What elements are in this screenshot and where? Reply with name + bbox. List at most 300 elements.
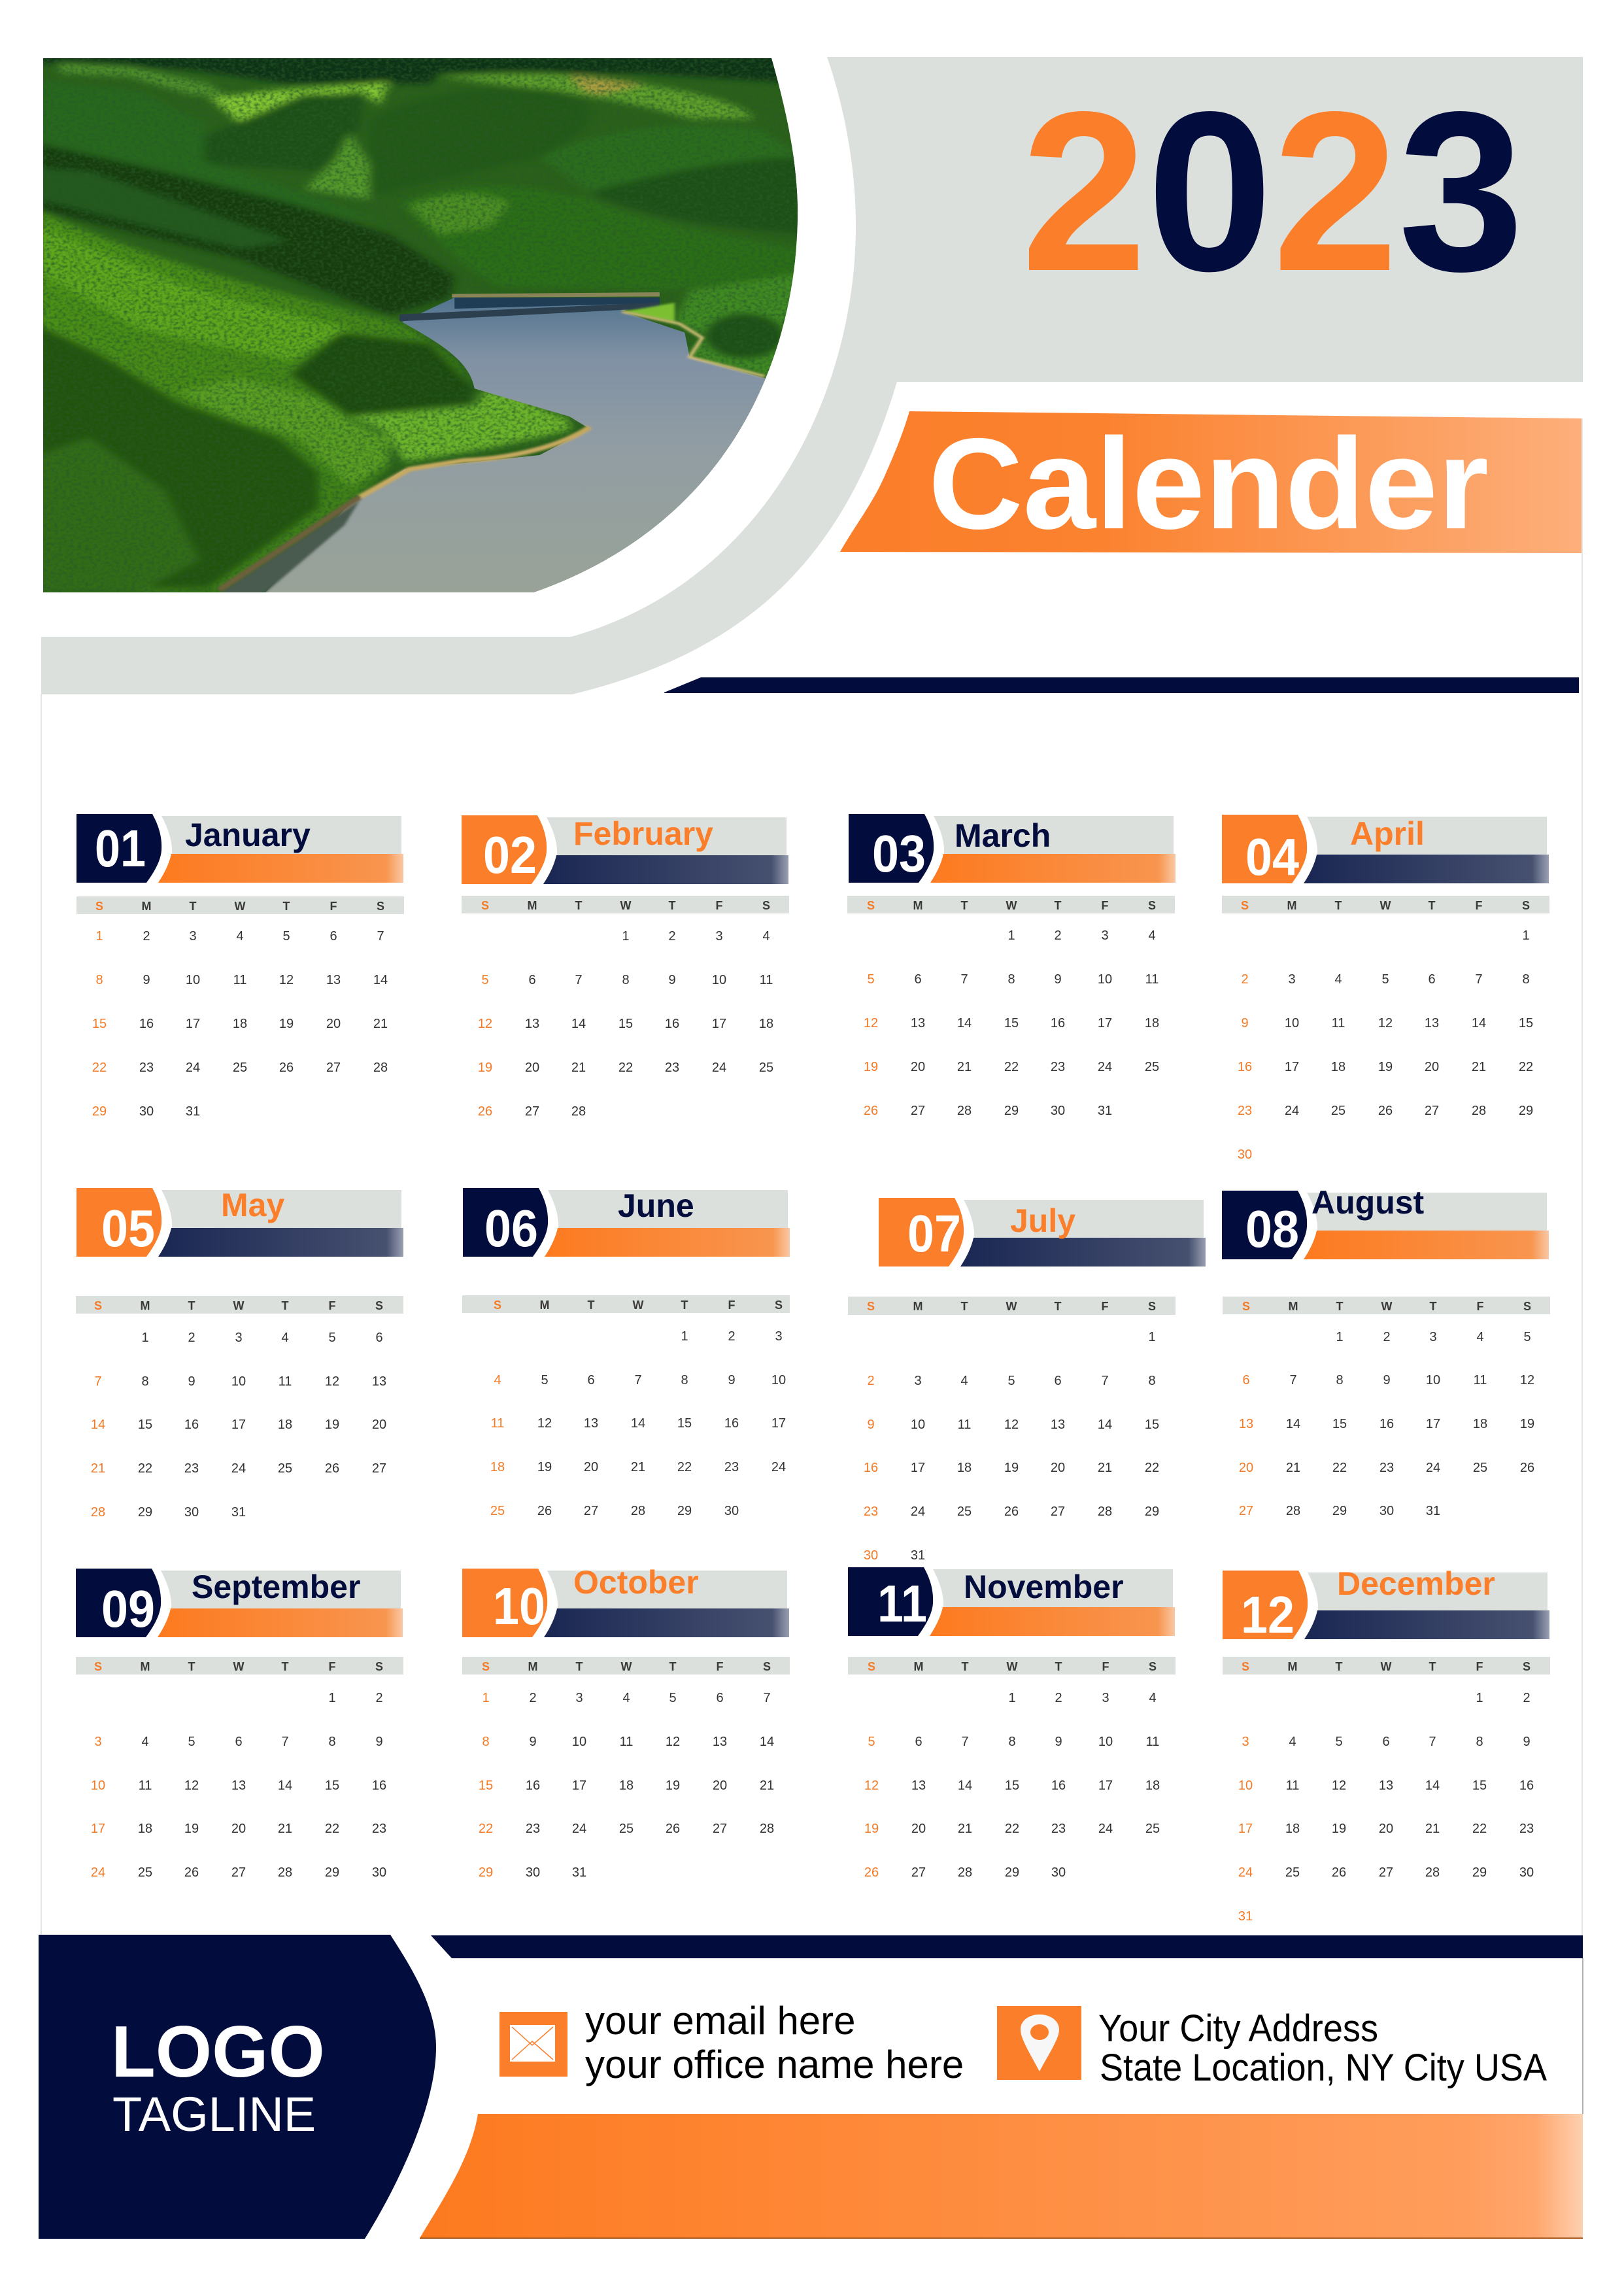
July dates: 31 [911, 1548, 925, 1563]
March dates: 29 [1004, 1104, 1019, 1118]
heading: Calender: Calender [928, 411, 1489, 556]
June dates: 10 [771, 1373, 786, 1387]
March header: March [955, 817, 1051, 854]
contact: email and office text: your office name here [585, 2043, 964, 2086]
July header [879, 1198, 1206, 1266]
April dates: 16 [1238, 1060, 1252, 1074]
January weekdays: T [190, 900, 196, 913]
November dates: 3 [1102, 1691, 1109, 1705]
May dates [91, 1331, 386, 1520]
July dates: 28 [1098, 1504, 1112, 1519]
November dates: 5 [868, 1735, 875, 1749]
March weekdays: T [1054, 899, 1062, 912]
July dates: 10 [911, 1418, 925, 1432]
January dates: 16 [139, 1017, 154, 1031]
September dates [91, 1691, 386, 1880]
January dates: 10 [186, 973, 200, 987]
August weekdays: S [1242, 1300, 1250, 1313]
tagline text: TAGLINE [112, 2087, 316, 2141]
August dates: 16 [1379, 1417, 1394, 1431]
November dates: 19 [864, 1822, 879, 1836]
October dates: 7 [763, 1691, 771, 1705]
March dates: 21 [957, 1060, 972, 1074]
July dates: 23 [864, 1504, 878, 1519]
May weekdays: W [233, 1299, 245, 1312]
June dates: 5 [541, 1373, 549, 1387]
March header: 03 [872, 824, 926, 883]
April dates: 28 [1472, 1104, 1486, 1118]
May weekdays: S [375, 1299, 383, 1312]
November weekdays [848, 1657, 1176, 1674]
December dates: 25 [1285, 1865, 1300, 1880]
August dates: 18 [1473, 1417, 1487, 1431]
July weekdays: S [867, 1300, 875, 1313]
December header: December [1337, 1565, 1495, 1602]
November weekdays: T [961, 1660, 969, 1673]
January dates: 22 [92, 1061, 107, 1075]
February dates: 18 [759, 1017, 773, 1031]
September dates: 26 [184, 1865, 199, 1880]
March dates: 9 [1054, 972, 1062, 987]
December weekdays: T [1429, 1660, 1436, 1673]
November dates: 12 [864, 1778, 879, 1793]
January dates: 19 [279, 1017, 294, 1031]
November dates: 20 [911, 1822, 926, 1836]
November dates: 2 [1055, 1691, 1062, 1705]
October header [462, 1564, 789, 1637]
September weekdays: W [233, 1660, 245, 1673]
September dates: 30 [372, 1865, 386, 1880]
November dates: 7 [961, 1735, 969, 1749]
October dates: 29 [479, 1865, 493, 1880]
January weekdays: S [377, 900, 384, 913]
August dates: 17 [1426, 1417, 1440, 1431]
January dates: 11 [233, 973, 246, 987]
January weekdays: M [141, 900, 152, 913]
February weekdays: F [715, 899, 723, 912]
October dates: 28 [760, 1822, 774, 1836]
January dates: 9 [143, 973, 150, 987]
October weekdays: T [575, 1660, 583, 1673]
May dates: 12 [325, 1374, 339, 1389]
March dates: 22 [1004, 1060, 1019, 1074]
November dates: 16 [1051, 1778, 1066, 1793]
May dates: 11 [279, 1374, 292, 1389]
May dates: 28 [91, 1505, 105, 1520]
November dates: 17 [1098, 1778, 1113, 1793]
March weekdays: T [961, 899, 968, 912]
April dates: 25 [1331, 1104, 1345, 1118]
October dates: 19 [666, 1778, 680, 1793]
July weekdays: S [1148, 1300, 1156, 1313]
September dates: 4 [141, 1735, 149, 1749]
December dates: 12 [1332, 1778, 1346, 1793]
October weekdays: S [482, 1660, 490, 1673]
September dates: 27 [231, 1865, 246, 1880]
forest texture [39, 52, 810, 599]
August dates: 28 [1286, 1504, 1300, 1518]
September dates: 14 [278, 1778, 292, 1793]
panel: August [1222, 1184, 1550, 1518]
August dates: 3 [1429, 1330, 1437, 1344]
April dates: 11 [1332, 1016, 1345, 1030]
footer right edge line [1582, 1958, 1583, 2114]
September dates: 10 [91, 1778, 105, 1793]
February header: February [573, 815, 713, 852]
August dates: 13 [1239, 1417, 1253, 1431]
June weekdays: S [775, 1299, 783, 1312]
logo text: LOGO [111, 2011, 325, 2092]
August weekdays: M [1288, 1300, 1298, 1313]
August dates: 24 [1426, 1461, 1440, 1475]
June header [463, 1187, 790, 1257]
May dates: 31 [231, 1505, 246, 1520]
August dates: 30 [1379, 1504, 1394, 1518]
March dates: 4 [1148, 928, 1156, 943]
May dates: 20 [372, 1418, 386, 1432]
September dates: 5 [188, 1735, 195, 1749]
June dates: 8 [681, 1373, 688, 1387]
January dates: 31 [186, 1104, 200, 1119]
December dates: 11 [1286, 1778, 1299, 1793]
January weekdays: S [95, 900, 103, 913]
heading: year 2023: 2023 [1021, 64, 1524, 318]
November dates: 28 [958, 1865, 972, 1880]
February dates: 12 [478, 1017, 492, 1031]
September weekdays: S [375, 1660, 383, 1673]
August dates: 2 [1383, 1330, 1391, 1344]
February weekdays: T [575, 899, 582, 912]
November dates: 22 [1005, 1822, 1019, 1836]
February dates: 9 [668, 973, 676, 987]
September dates: 24 [91, 1865, 105, 1880]
February weekdays: W [620, 899, 632, 912]
July dates: 24 [911, 1504, 925, 1519]
panel: October [462, 1564, 790, 1880]
October dates: 16 [526, 1778, 540, 1793]
September dates: 22 [325, 1822, 339, 1836]
June dates: 22 [677, 1460, 692, 1474]
July weekdays: F [1101, 1300, 1109, 1313]
December dates: 30 [1519, 1865, 1534, 1880]
February dates: 11 [760, 973, 773, 987]
June dates: 19 [537, 1460, 552, 1474]
April dates: 5 [1381, 972, 1389, 987]
July dates: 4 [960, 1374, 968, 1388]
February dates: 15 [618, 1017, 633, 1031]
August dates: 1 [1336, 1330, 1344, 1344]
October dates: 24 [572, 1822, 586, 1836]
June dates: 30 [724, 1504, 739, 1518]
October dates: 31 [572, 1865, 586, 1880]
July dates: 6 [1054, 1374, 1062, 1388]
October dates: 21 [760, 1778, 774, 1793]
December dates [1238, 1691, 1534, 1924]
July dates: 22 [1145, 1461, 1159, 1475]
March dates: 10 [1098, 972, 1112, 987]
May weekdays: S [94, 1299, 102, 1312]
June weekdays [462, 1295, 790, 1313]
September weekdays: T [281, 1660, 289, 1673]
July dates: 2 [867, 1374, 875, 1388]
April dates: 7 [1475, 972, 1483, 987]
November header [848, 1567, 1175, 1636]
November dates: 24 [1098, 1822, 1113, 1836]
March dates: 7 [960, 972, 968, 987]
July dates: 18 [957, 1461, 972, 1475]
December dates: 18 [1285, 1822, 1300, 1836]
October weekdays: S [763, 1660, 771, 1673]
May header: May [221, 1187, 284, 1223]
August dates: 4 [1476, 1330, 1484, 1344]
November dates: 10 [1098, 1735, 1113, 1749]
December dates: 22 [1472, 1822, 1487, 1836]
March dates: 31 [1098, 1104, 1112, 1118]
October dates: 2 [529, 1691, 537, 1705]
August weekdays: T [1429, 1300, 1437, 1313]
September weekdays: M [140, 1660, 150, 1673]
January dates: 28 [373, 1061, 388, 1075]
July header: 07 [907, 1204, 961, 1263]
April dates: 27 [1425, 1104, 1439, 1118]
June dates: 13 [584, 1416, 598, 1431]
July dates: 14 [1098, 1418, 1112, 1432]
February weekdays: M [527, 899, 537, 912]
June dates: 4 [494, 1373, 501, 1387]
May dates: 8 [141, 1374, 149, 1389]
December dates: 5 [1335, 1735, 1343, 1749]
June dates: 6 [587, 1373, 595, 1387]
May dates: 5 [328, 1331, 336, 1345]
September dates: 3 [94, 1735, 102, 1749]
September header: 09 [101, 1580, 155, 1638]
March dates [864, 928, 1159, 1118]
August dates: 27 [1239, 1504, 1253, 1518]
February dates: 7 [575, 973, 583, 987]
panel: November [848, 1567, 1176, 1880]
September dates: 16 [372, 1778, 386, 1793]
August dates: 31 [1426, 1504, 1440, 1518]
November weekdays: F [1102, 1660, 1109, 1673]
June dates: 2 [728, 1329, 736, 1344]
September weekdays: F [328, 1660, 336, 1673]
November weekdays: W [1007, 1660, 1017, 1673]
July dates: 5 [1007, 1374, 1015, 1388]
February dates: 16 [665, 1017, 679, 1031]
March weekdays: M [913, 899, 923, 912]
August dates: 19 [1520, 1417, 1534, 1431]
November header: November [964, 1569, 1124, 1605]
February dates: 19 [478, 1061, 492, 1075]
August dates: 29 [1332, 1504, 1347, 1518]
April dates: 14 [1472, 1016, 1486, 1030]
March dates: 13 [911, 1016, 925, 1030]
January header: January [185, 817, 311, 853]
February weekdays: S [762, 899, 770, 912]
April dates: 4 [1334, 972, 1342, 987]
October dates: 4 [622, 1691, 630, 1705]
September dates: 9 [375, 1735, 383, 1749]
July dates: 12 [1004, 1418, 1019, 1432]
March dates: 27 [911, 1104, 925, 1118]
March weekdays: F [1101, 899, 1109, 912]
August dates: 10 [1426, 1373, 1440, 1387]
December dates: 15 [1472, 1778, 1487, 1793]
February dates [478, 929, 773, 1119]
May dates: 27 [372, 1461, 386, 1476]
January weekdays [76, 896, 404, 914]
January dates: 1 [95, 929, 103, 944]
October dates: 8 [482, 1735, 490, 1749]
December weekdays: M [1288, 1660, 1297, 1673]
January dates: 27 [326, 1061, 341, 1075]
April dates: 12 [1378, 1016, 1393, 1030]
December dates: 26 [1332, 1865, 1346, 1880]
October dates: 20 [713, 1778, 727, 1793]
April dates: 18 [1331, 1060, 1345, 1074]
September dates: 1 [328, 1691, 336, 1705]
March dates: 2 [1054, 928, 1062, 943]
icon: email envelope [499, 2012, 567, 2077]
November dates [864, 1691, 1160, 1880]
December weekdays: F [1476, 1660, 1483, 1673]
September header: September [192, 1569, 360, 1605]
January weekdays: W [234, 900, 246, 913]
banner: orange Calender ribbon [840, 411, 1583, 553]
August header: August [1311, 1184, 1425, 1221]
January dates: 6 [330, 929, 337, 944]
August dates: 6 [1242, 1373, 1250, 1387]
October dates: 18 [619, 1778, 634, 1793]
October dates: 12 [666, 1735, 680, 1749]
April dates: 22 [1519, 1060, 1533, 1074]
May dates: 17 [231, 1418, 246, 1432]
June header: June [618, 1187, 694, 1224]
December dates: 24 [1238, 1865, 1253, 1880]
April dates: 13 [1425, 1016, 1439, 1030]
November weekdays: S [1149, 1660, 1157, 1673]
June dates: 29 [677, 1504, 692, 1518]
September dates: 25 [138, 1865, 152, 1880]
February header [462, 815, 788, 884]
July weekdays: T [961, 1300, 968, 1313]
May header: 05 [101, 1199, 155, 1257]
July dates: 27 [1051, 1504, 1065, 1519]
August dates: 22 [1332, 1461, 1347, 1475]
July dates: 19 [1004, 1461, 1019, 1475]
August dates: 7 [1289, 1373, 1297, 1387]
June dates: 21 [631, 1460, 645, 1474]
July header: July [1010, 1202, 1075, 1239]
October dates: 6 [716, 1691, 724, 1705]
January dates: 18 [233, 1017, 247, 1031]
October dates: 10 [572, 1735, 586, 1749]
February dates: 14 [571, 1017, 586, 1031]
March dates: 28 [957, 1104, 972, 1118]
April dates: 23 [1238, 1104, 1252, 1118]
June dates: 17 [771, 1416, 786, 1431]
June weekdays: F [728, 1299, 735, 1312]
May dates: 21 [91, 1461, 105, 1476]
April weekdays: S [1241, 899, 1249, 912]
November dates: 25 [1145, 1822, 1160, 1836]
river [220, 292, 810, 599]
March dates: 20 [911, 1060, 925, 1074]
June dates: 3 [775, 1329, 783, 1344]
footer: orange band [420, 2114, 1583, 2238]
December dates: 6 [1382, 1735, 1390, 1749]
July dates: 7 [1101, 1374, 1109, 1388]
November header: 11 [877, 1574, 927, 1633]
photo: forest valley with river [39, 52, 810, 599]
April header: 04 [1245, 828, 1299, 886]
September dates: 29 [325, 1865, 339, 1880]
August dates: 9 [1383, 1373, 1391, 1387]
April dates: 20 [1425, 1060, 1439, 1074]
March dates: 26 [864, 1104, 878, 1118]
panel: February [462, 815, 789, 1119]
icon: location pin [997, 2006, 1081, 2080]
March dates: 23 [1051, 1060, 1065, 1074]
December dates: 2 [1523, 1691, 1531, 1705]
January header: 01 [95, 819, 146, 877]
May weekdays: T [281, 1299, 289, 1312]
October dates: 22 [479, 1822, 493, 1836]
October dates [479, 1691, 774, 1880]
February dates: 8 [622, 973, 630, 987]
December dates: 1 [1476, 1691, 1483, 1705]
January dates: 7 [377, 929, 384, 944]
June weekdays: T [681, 1299, 688, 1312]
June dates: 14 [631, 1416, 645, 1431]
June dates: 12 [537, 1416, 552, 1431]
March dates: 17 [1098, 1016, 1112, 1030]
July weekdays: T [1054, 1300, 1062, 1313]
December dates: 21 [1425, 1822, 1440, 1836]
April header: April [1350, 815, 1425, 852]
May header [76, 1187, 403, 1257]
August dates: 11 [1474, 1373, 1487, 1387]
August dates: 20 [1239, 1461, 1253, 1475]
September weekdays: S [94, 1660, 102, 1673]
September header [76, 1569, 403, 1638]
May dates: 24 [231, 1461, 246, 1476]
September dates: 12 [184, 1778, 199, 1793]
June weekdays: S [494, 1299, 501, 1312]
November dates: 27 [911, 1865, 926, 1880]
December dates: 19 [1332, 1822, 1346, 1836]
February dates: 20 [525, 1061, 539, 1075]
February dates: 5 [481, 973, 489, 987]
April header [1222, 815, 1549, 886]
July dates: 13 [1051, 1418, 1065, 1432]
November dates: 8 [1008, 1735, 1016, 1749]
November dates: 23 [1051, 1822, 1066, 1836]
May dates: 23 [184, 1461, 199, 1476]
June dates: 18 [490, 1460, 505, 1474]
January dates: 3 [189, 929, 197, 944]
May dates: 22 [138, 1461, 152, 1476]
May dates: 1 [141, 1331, 149, 1345]
July dates: 25 [957, 1504, 972, 1519]
June dates: 7 [634, 1373, 642, 1387]
panel: April [1222, 815, 1549, 1162]
November dates: 14 [958, 1778, 972, 1793]
December weekdays: S [1523, 1660, 1531, 1673]
February dates: 28 [571, 1104, 586, 1119]
June dates: 9 [728, 1373, 736, 1387]
November weekdays: M [914, 1660, 923, 1673]
